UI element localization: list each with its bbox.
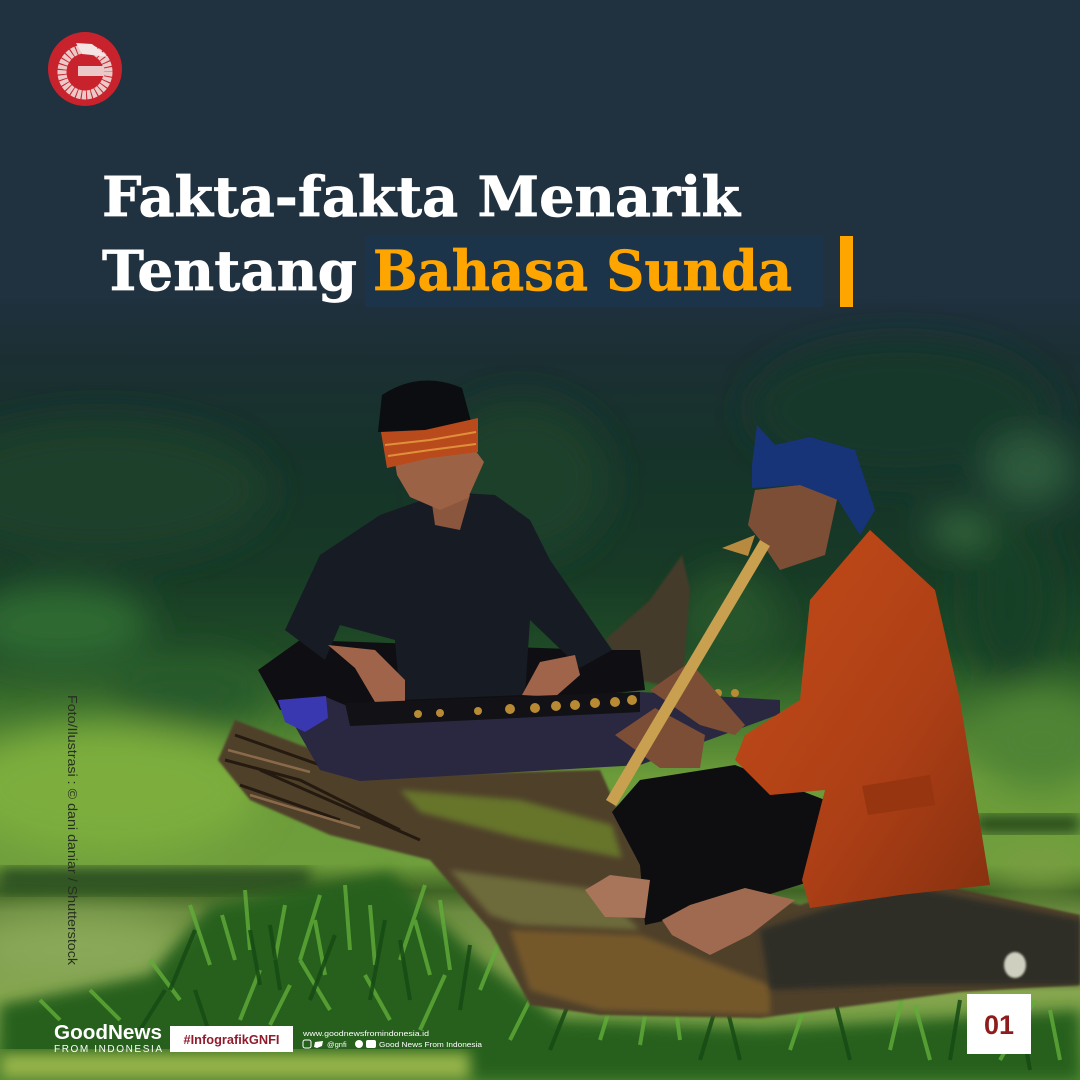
jacket — [735, 530, 990, 908]
musician in black with headband — [258, 380, 645, 710]
page number box: 01 — [984, 1010, 1014, 1040]
website and social: Good News From Indonesia — [379, 1040, 483, 1049]
page number box — [967, 994, 1031, 1054]
website and social: www.goodnewsfromindonesia.id — [302, 1029, 429, 1038]
jacket pocket — [862, 775, 935, 815]
logo badge — [48, 32, 122, 106]
bamboo flute — [606, 540, 770, 806]
hashtag badge — [170, 1026, 293, 1052]
website and social — [302, 1029, 483, 1049]
torso and arms — [285, 492, 612, 700]
black trousers — [612, 765, 825, 925]
title: Bahasa Sunda — [373, 238, 792, 303]
foreground grass — [0, 872, 1080, 1080]
GoodNews wordmark: GoodNews — [54, 1022, 162, 1044]
title: Fakta-fakta Menarik — [102, 164, 742, 229]
website and social: @gnfi — [327, 1040, 347, 1049]
cursor bar — [840, 236, 853, 307]
GoodNews wordmark: FROM INDONESIA — [54, 1044, 162, 1055]
title — [102, 164, 853, 307]
hand and forearm — [615, 708, 705, 768]
photo credit: Foto/Ilustrasi : © dani daniar / Shutterstock — [65, 695, 80, 966]
hands — [328, 645, 405, 702]
headband — [381, 418, 478, 468]
title: Tentang — [102, 238, 357, 303]
neck and face — [748, 485, 838, 570]
GoodNews wordmark — [54, 1022, 162, 1055]
hair — [378, 380, 472, 432]
neck and face — [430, 490, 470, 530]
hashtag badge: #InfografikGNFI — [184, 1033, 280, 1047]
musician with red jacket and flute — [585, 425, 990, 955]
title highlight — [365, 236, 823, 307]
tree stump behind the musicians — [605, 555, 690, 690]
fallen log — [218, 720, 1080, 1018]
kacapi instrument — [278, 689, 780, 781]
feet — [585, 875, 650, 918]
legs — [258, 640, 645, 710]
blue headscarf — [752, 425, 875, 535]
footer brand — [54, 1022, 483, 1055]
